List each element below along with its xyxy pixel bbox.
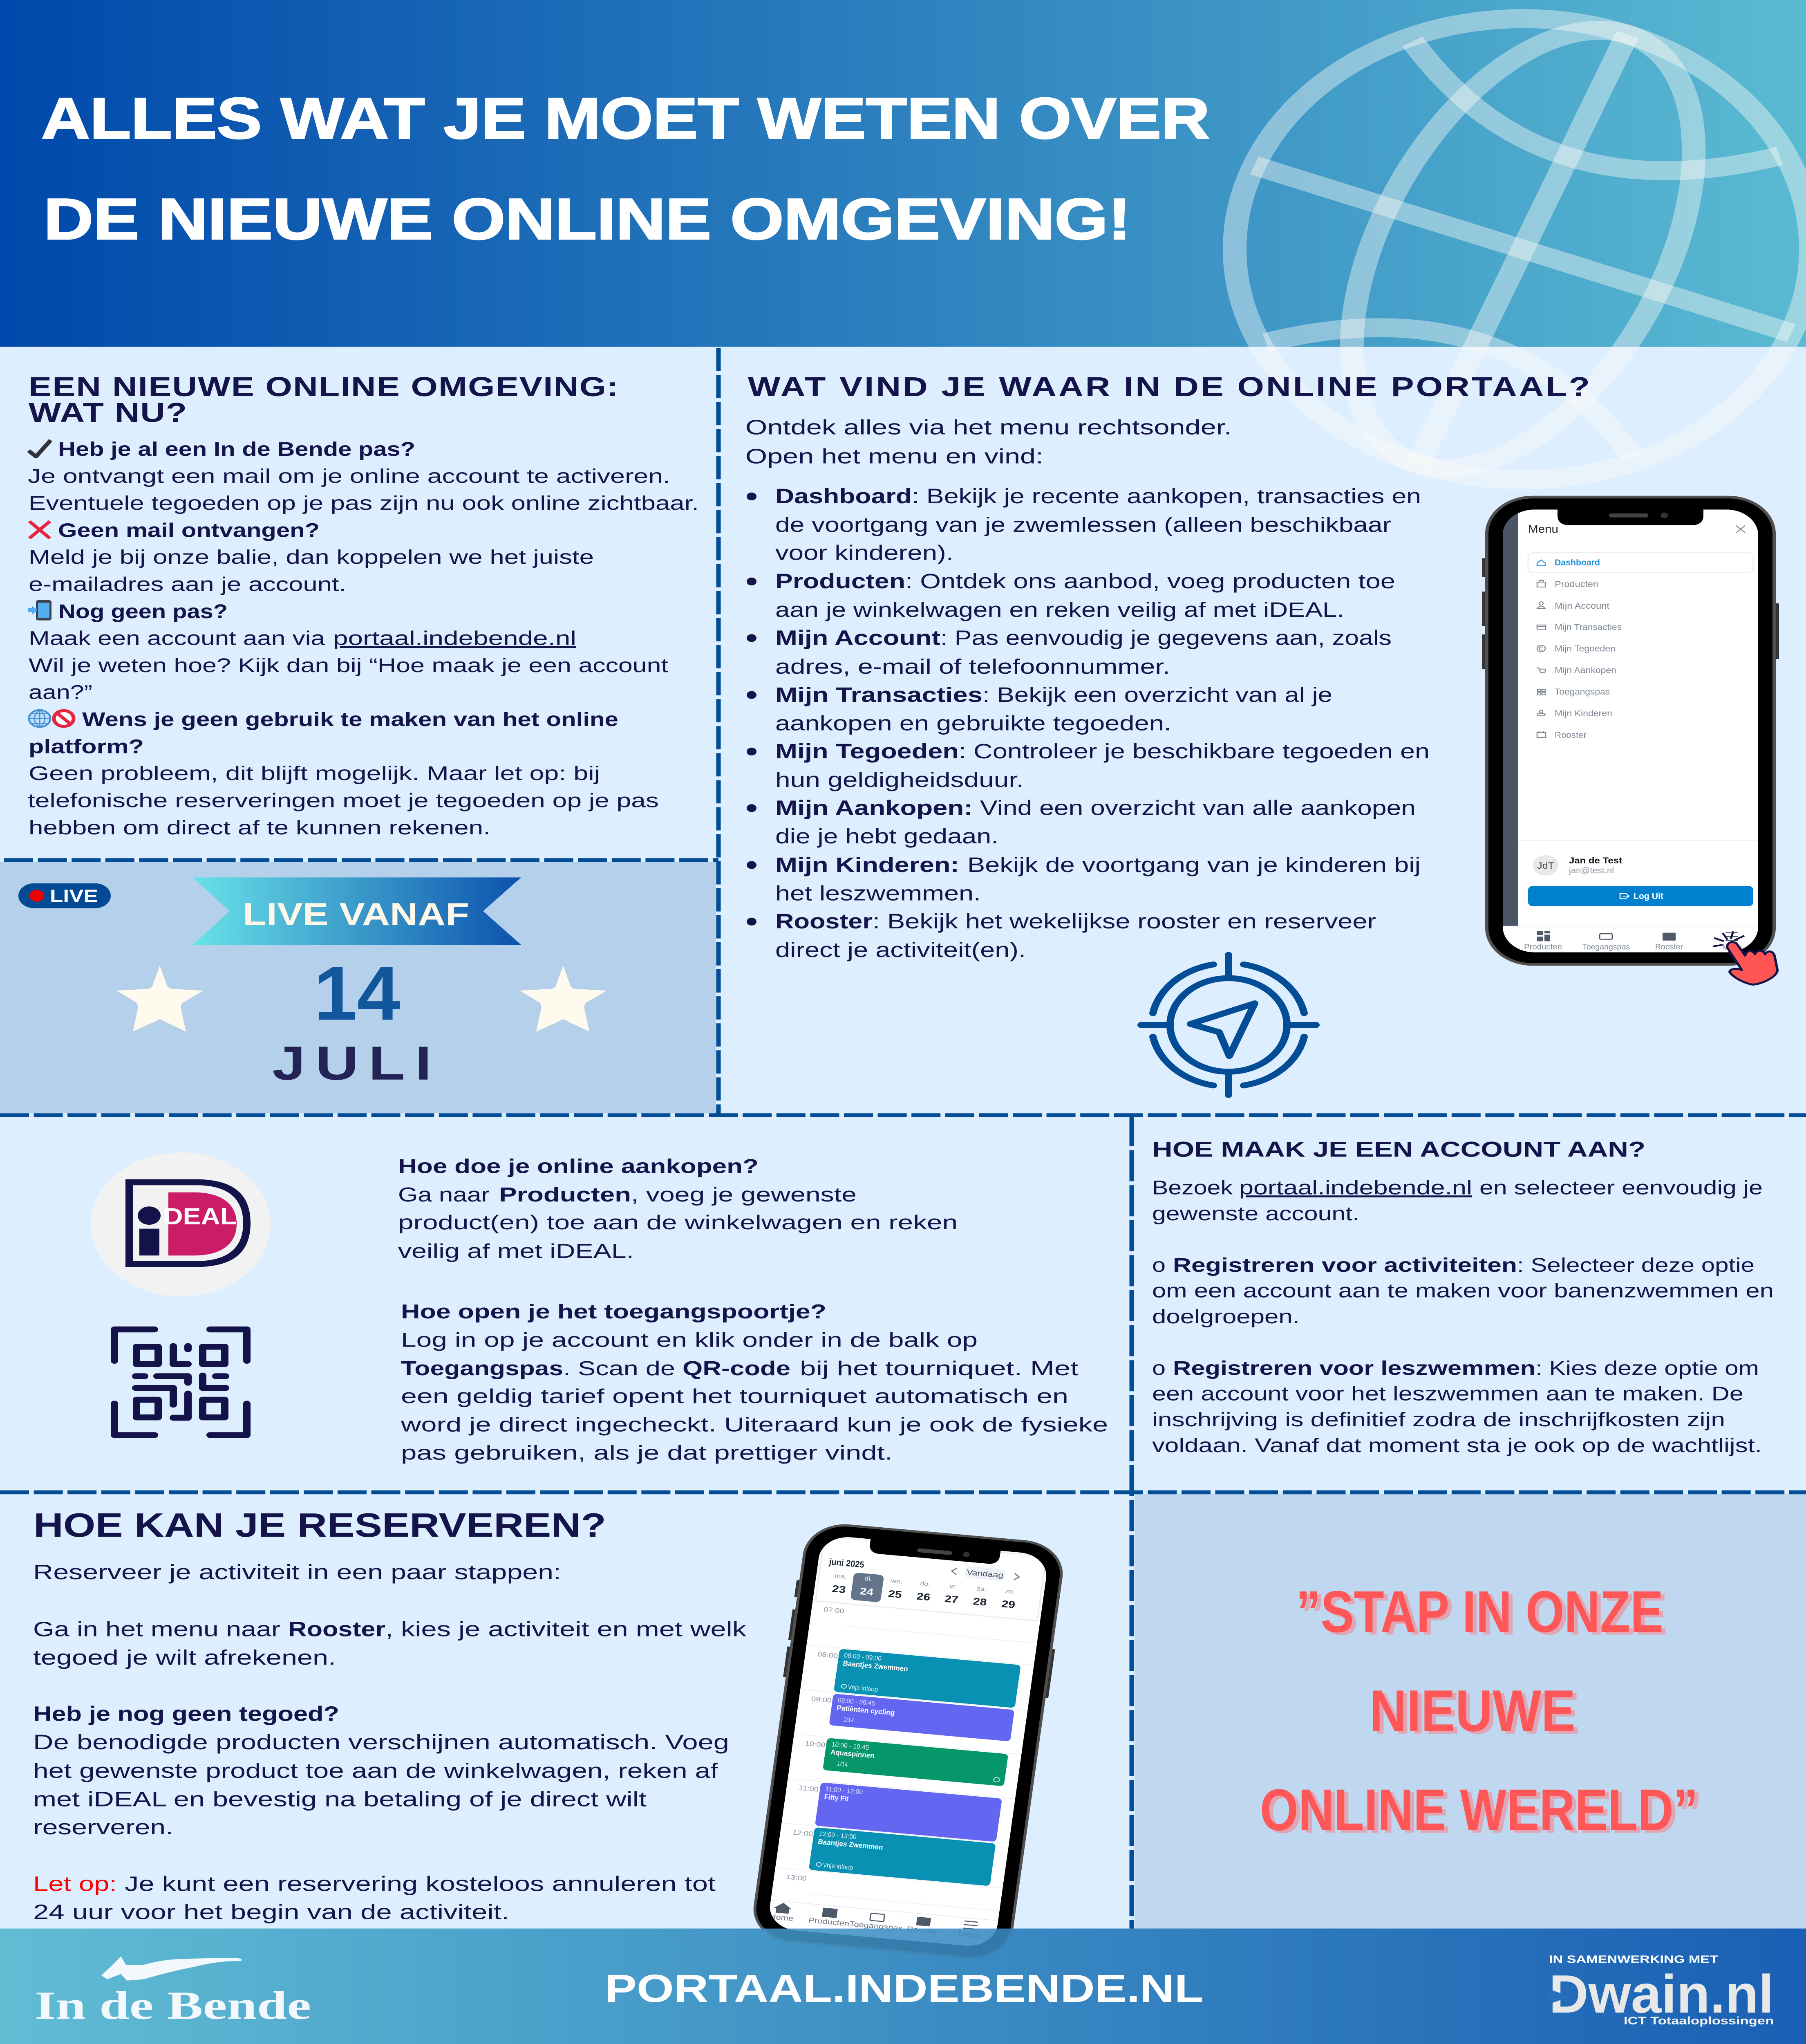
text: bezoek portaal: portaal.indebende.nl (1239, 1177, 1472, 1199)
event: baantjes zwemmen (834, 1649, 1021, 1708)
bullet list: direct je activiteit(en). (775, 939, 1026, 961)
bullet list: : Ontdek ons aanbod, voeg producten toe (905, 570, 1395, 593)
text block: toegangspoortje: Hoe open je het toegangspoortje? (401, 1300, 826, 1322)
text: nog geen pas: Wil je weten hoe? Kijk dan bij “Hoe maak je een account (29, 654, 668, 677)
text: let op: Let op: (33, 1873, 117, 1896)
icon: iDEAL logo (91, 1152, 271, 1296)
text: registreren activiteiten: doelgroepen. (1152, 1306, 1300, 1327)
menu item icons (1537, 560, 1546, 737)
text: heb je al een pas: Eventuele tegoeden op je pas zijn nu ook online zichtbaar. (29, 492, 699, 514)
text: nog geen pas: portaal.indebende.nl (333, 627, 576, 649)
logo: in de bende: In de Bende (35, 1983, 311, 2028)
text: stappen: , kies je activiteit en met welk (385, 1618, 747, 1641)
text block: toegangspoortje: Toegangspas (401, 1357, 563, 1380)
text block: toegangspoortje: QR-code (683, 1357, 790, 1380)
date header card: Vandaag (966, 1568, 1004, 1580)
bottom navigation: Producten (1524, 942, 1562, 951)
bullet list: Mijn Account (775, 627, 940, 650)
menu items: Toegangspas (1555, 687, 1610, 697)
date header card: 24 (859, 1585, 874, 1598)
menu items: Rooster (1555, 730, 1587, 740)
icon: phone with arrow (28, 600, 51, 621)
text: registreren leszwemmen: : Kies deze optie om (1535, 1357, 1759, 1379)
text block: toegangspoortje: bij het tourniquet. Met (800, 1357, 1079, 1380)
bullet list: Mijn Transacties (775, 684, 982, 706)
text: registreren activiteiten (1152, 1254, 1774, 1327)
bullet list: het leszwemmen. (775, 882, 981, 905)
panel: live vanaf 14 juli (18, 877, 606, 1090)
date header card: 29 (1001, 1598, 1016, 1610)
text: geen mail ontvangen: Meld je bij onze balie, dan koppelen we het juiste (29, 546, 594, 568)
text: let op: 24 uur voor het begin van de activiteit. (33, 1901, 509, 1924)
intro text: Ontdek alles via het menu rechtsonder. (745, 416, 1232, 439)
bullet list: die je hebt gedaan. (775, 825, 998, 848)
divider and user block: Jan de Test (1569, 856, 1622, 865)
text: nog geen pas: aan?” (29, 681, 92, 703)
heading: wat vind je waar: WAT VIND JE WAAR IN DE ONLINE PORTAAL? (748, 372, 1590, 402)
text: nog geen tegoed: De benodigde producten verschijnen automatisch. Voeg (33, 1731, 729, 1754)
phone: rooster screenshot (747, 1522, 1070, 1961)
text block: online aankopen: veilig af met iDEAL. (398, 1239, 634, 1262)
text: geen gebruik online platform: hebben om direct af te kunnen rekenen. (29, 817, 490, 838)
heading: een nieuwe online omgeving: WAT NU? (29, 397, 187, 428)
date header card: 27 (944, 1593, 959, 1605)
text: registreren activiteiten: : Selecteer deze optie (1517, 1254, 1755, 1276)
text block: online aankopen: Hoe doe je online aankopen? (398, 1155, 759, 1177)
time labels: 07:00 (824, 1606, 845, 1615)
time labels: 12:00 (792, 1829, 813, 1838)
phone notch (869, 1538, 1001, 1564)
time labels: 11:00 (798, 1784, 819, 1793)
bullet list: Bekijk de voortgang van je kinderen bij (967, 854, 1421, 876)
event: baantjes zwemmen: Baantjes Zwemmen (817, 1838, 884, 1851)
icon: QR code (114, 1329, 247, 1435)
text: nog geen tegoed: het gewenste product toe aan de winkelwagen, reken af (33, 1759, 718, 1782)
date header card: vr. (949, 1583, 958, 1590)
bullet list: hun geldigheidsduur. (775, 769, 1024, 791)
footer url: PORTAAL.INDEBENDE.NL (605, 1967, 1204, 2010)
bullet list: : Pas eenvoudig je gegevens aan, zoals (940, 627, 1392, 650)
text: geen gebruik online platform: Wens je geen gebruik te maken van het online (82, 708, 618, 731)
phone: menu screenshot (1482, 497, 1779, 964)
bullet list: de voortgang van je zwemlessen (alleen beschikbaar (775, 513, 1391, 536)
event: aquaspinnen (823, 1738, 1008, 1786)
divider and user block: JdT (1537, 861, 1554, 871)
text: stappen: Ga in het menu naar (33, 1618, 280, 1641)
text: stappen: Rooster (288, 1618, 385, 1641)
heading: een nieuwe online omgeving (29, 372, 618, 428)
text: registreren activiteiten: o (1152, 1254, 1166, 1276)
date header card: 23 (831, 1583, 846, 1595)
phone screen (1503, 509, 1758, 953)
divider and user block (1518, 840, 1758, 876)
date header card: 25 (888, 1588, 903, 1600)
bottom navigation: Rooster (906, 1925, 939, 1936)
event: aquaspinnen: Aquaspinnen (830, 1748, 875, 1760)
text: geen mail ontvangen: e-mailadres aan je account. (29, 573, 346, 595)
footer base (0, 1929, 1806, 2044)
text: nog geen tegoed: met iDEAL en bevestig na betaling of je direct wilt (33, 1788, 647, 1811)
text: registreren leszwemmen: voldaan. Vanaf dat moment sta je ook op de wachtlijst. (1152, 1434, 1762, 1457)
panel: een nieuwe online omgeving (28, 372, 699, 838)
title: DE NIEUWE ONLINE OMGEVING! (44, 187, 1131, 252)
text: heb je al een pas (28, 438, 699, 514)
text: nog geen tegoed (33, 1703, 729, 1839)
text: registreren activiteiten: om een account aan te maken voor banenzwemmen en (1152, 1280, 1774, 1302)
dashed dividers (0, 348, 1806, 1929)
text: registreren leszwemmen: o (1152, 1357, 1166, 1379)
menu items: Dashboard (1555, 558, 1600, 567)
bullet list: Vind een overzicht van alle aankopen (980, 797, 1416, 820)
time labels: 08:00 (817, 1651, 838, 1660)
menu items (1555, 558, 1622, 740)
logo: dwain: ICT Totaaloplossingen (1624, 2014, 1774, 2027)
bullet list: Dashboard (775, 485, 912, 508)
panel: slogan background (1135, 1494, 1806, 1929)
text: let op (33, 1873, 716, 1924)
event: fifty fit (815, 1782, 1002, 1842)
text: geen gebruik online platform: Geen probleem, dit blijft mogelijk. Maar let op: bij (29, 762, 600, 784)
event: aquaspinnen: 10:00 - 10:45 (831, 1741, 870, 1751)
panel: live date background (0, 862, 716, 1113)
bullet list: voor kinderen). (775, 542, 953, 565)
event: fifty fit: Fifty Fit (824, 1793, 849, 1803)
event: baantjes zwemmen (809, 1827, 996, 1886)
bullet list: : Bekijk het wekelijkse rooster en reserveer (873, 910, 1376, 933)
divider and user block: jan@test.nl (1569, 866, 1614, 875)
phone notch (1558, 509, 1703, 525)
text block: toegangspoortje: een geldig tarief opent het tourniquet automatisch en (401, 1385, 1068, 1407)
text block: online aankopen (398, 1155, 958, 1262)
bullet list: Rooster (775, 910, 873, 933)
text: registreren leszwemmen: Registreren voor leszwemmen (1173, 1357, 1535, 1379)
bottom navigation: Menu (958, 1930, 981, 1940)
ribbon: live vanaf (192, 877, 521, 945)
date number: 14 (314, 950, 400, 1036)
panel: account aanmaken (1152, 1137, 1774, 1457)
text block: toegangspoortje (401, 1300, 1108, 1464)
text: registreren leszwemmen (1152, 1357, 1762, 1457)
date header card: za. (976, 1585, 987, 1593)
phone body (1487, 497, 1774, 964)
bottom navigation: Toegangspas (1582, 942, 1630, 951)
event: baantjes zwemmen: Vrije inloop (847, 1683, 878, 1693)
bottom navigation: Toegangspas (849, 1920, 903, 1933)
event: patiënten cycling: Patiënten cycling (836, 1704, 895, 1717)
bullet list: Mijn Aankopen: (775, 797, 973, 820)
live badge: LIVE (50, 886, 98, 906)
icon: compass navigation (1141, 955, 1316, 1095)
event: baantjes zwemmen: 08:00 - 09:00 (844, 1652, 882, 1662)
event: baantjes zwemmen: Baantjes Zwemmen (842, 1659, 909, 1673)
footer band (0, 1929, 1806, 2044)
text: nog geen tegoed: reserveren. (33, 1816, 173, 1839)
phone screen (765, 1535, 1052, 1948)
date header card: juni 2025 (828, 1557, 865, 1570)
date month: JULI (272, 1037, 432, 1090)
phone side buttons (783, 1580, 1061, 1701)
date header card: 28 (972, 1596, 987, 1608)
icon: pointing hand (1713, 931, 1777, 984)
text block: online aankopen: , voeg je gewenste (631, 1183, 857, 1206)
title (41, 86, 1210, 252)
text: heb je al een pas: Heb je al een In de Bende pas? (58, 438, 415, 460)
event: fifty fit: 11:00 - 12:00 (825, 1785, 863, 1796)
text: stappen: tegoed je wilt afrekenen. (33, 1646, 336, 1669)
time labels: 09:00 (811, 1695, 832, 1704)
bullet list: Mijn Tegoeden (775, 740, 959, 763)
live badge (18, 883, 111, 908)
date header card: ma. (834, 1573, 847, 1580)
close icon (1736, 526, 1745, 533)
icon: red cross (29, 521, 50, 538)
intro text: Open het menu en vind: (745, 445, 1043, 468)
menu title: Menu (1528, 523, 1558, 535)
header band (0, 0, 1806, 347)
text: heb je al een pas: Je ontvangt een mail om je online account te activeren. (28, 465, 670, 487)
event: patiënten cycling: 09:00 - 09:45 (837, 1697, 876, 1707)
text: registreren activiteiten: Registreren voor activiteiten (1173, 1254, 1517, 1276)
event: patiënten cycling (829, 1694, 1014, 1741)
icon: right star (520, 966, 606, 1031)
text: stappen (33, 1561, 747, 1669)
date header card: wo. (890, 1578, 903, 1585)
text: nog geen pas: Nog geen pas? (58, 601, 228, 623)
text: geen gebruik online platform (28, 708, 659, 838)
menu items: Mijn Kinderen (1555, 708, 1612, 718)
ribbon: live vanaf: LIVE VANAF (243, 896, 469, 932)
bottom navigation (766, 1900, 1000, 1941)
text block: toegangspoortje: . Scan de (563, 1357, 675, 1380)
panel: hoe kan je reserveren (33, 1506, 747, 1924)
phone body (751, 1522, 1065, 1961)
bullet list: : Bekijk een overzicht van al je (982, 684, 1332, 706)
panel: wat vind je waar (745, 372, 1590, 961)
bullet list: Mijn Kinderen: (775, 854, 959, 876)
bullet list: aan je winkelwagen en reken veilig af met iDEAL. (775, 598, 1344, 621)
grid lines (772, 1623, 1037, 1911)
text: bezoek portaal: en selecteer eenvoudig je (1479, 1177, 1763, 1199)
text block: online aankopen: product(en) toe aan de winkelwagen en reken (398, 1211, 958, 1234)
text: bezoek portaal (1152, 1177, 1763, 1224)
bullet list (747, 485, 1430, 961)
time labels: 10:00 (805, 1739, 826, 1748)
text block: online aankopen: Ga naar (398, 1183, 490, 1206)
text: registreren leszwemmen: een account voor het leszwemmen aan te maken. De (1152, 1383, 1743, 1405)
text block: toegangspoortje: Log in op je account en klik onder in de balk op (401, 1328, 978, 1351)
event: baantjes zwemmen: Vrije inloop (822, 1861, 853, 1871)
icon: left star (116, 966, 203, 1031)
text: bezoek portaal: Bezoek (1152, 1177, 1233, 1199)
text: let op: Je kunt een reservering kosteloos annuleren tot (125, 1873, 716, 1896)
bottom navigation: Home (769, 1913, 794, 1923)
date header card: zo. (1005, 1588, 1016, 1595)
text: nog geen tegoed: Heb je nog geen tegoed? (33, 1703, 339, 1726)
bullet list: adres, e-mail of telefoonnummer. (775, 655, 1170, 678)
logo: dwain: IN SAMENWERKING MET (1549, 1954, 1718, 1966)
text block: toegangspoortje: word je direct ingecheckt. Uiteraard kun je ook de fysieke (401, 1413, 1108, 1436)
time labels (786, 1606, 845, 1882)
bottom navigation: Menu (1722, 942, 1742, 951)
date header card: di. (864, 1575, 873, 1582)
log out button (1528, 886, 1753, 906)
date header card (816, 1537, 1046, 1621)
slogan: NIEUWE (1370, 1678, 1575, 1744)
bottom navigation: Rooster (1655, 942, 1683, 951)
bullet list: : Controleer je beschikbare tegoeden en (959, 740, 1430, 763)
bullet list: aankopen en gebruikte tegoeden. (775, 712, 1171, 735)
menu items: Mijn Account (1555, 601, 1609, 610)
heading: reserveren: HOE KAN JE RESERVEREN? (34, 1506, 606, 1544)
text: nog geen pas (29, 601, 668, 703)
event: aquaspinnen: 1/14 (837, 1760, 848, 1768)
text: nog geen pas: Maak een account aan via (29, 627, 325, 649)
icon: iDEAL logo: DEAL (163, 1203, 237, 1230)
text: stappen: Reserveer je activiteit in een paar stappen: (33, 1561, 561, 1584)
slogan (1260, 1578, 1698, 1843)
text: geen gebruik online platform: platform? (29, 735, 144, 758)
text block: online aankopen: Producten (499, 1183, 631, 1206)
icon: globe and prohibited sign (29, 710, 74, 727)
icon: check mark (29, 440, 51, 457)
menu items: Producten (1555, 579, 1598, 589)
heading: account aanmaken: HOE MAAK JE EEN ACCOUNT AAN? (1152, 1137, 1645, 1161)
phone side buttons (1482, 558, 1779, 669)
text: registreren leszwemmen: inschrijving is definitief zodra de inschrijfkosten zijn (1152, 1409, 1725, 1430)
menu items: Mijn Transacties (1555, 622, 1622, 632)
menu items: Mijn Aankopen (1555, 666, 1616, 675)
bullet list: Producten (775, 570, 905, 593)
event: patiënten cycling: 1/14 (843, 1716, 855, 1724)
text block: toegangspoortje: pas gebruiken, als je dat prettiger vindt. (401, 1441, 893, 1464)
time labels: 13:00 (786, 1873, 807, 1882)
bottom navigation (1503, 926, 1758, 951)
text: geen mail ontvangen (29, 519, 594, 595)
date header card: do. (920, 1580, 931, 1588)
bottom navigation: Producten (808, 1916, 850, 1928)
intro text (745, 416, 1232, 468)
logo: in de bende (35, 1957, 311, 2028)
icon: globe watermark (1223, 9, 1806, 489)
menu items: Mijn Tegoeden (1555, 644, 1616, 653)
log out button: Log Uit (1634, 892, 1663, 901)
text: bezoek portaal: gewenste account. (1152, 1203, 1359, 1224)
heading: een nieuwe online omgeving: EEN NIEUWE ONLINE OMGEVING: (29, 372, 618, 402)
date header card: 26 (916, 1590, 931, 1603)
bullet list: : Bekijk je recente aankopen, transacties en (912, 485, 1421, 508)
text: geen mail ontvangen: Geen mail ontvangen? (58, 519, 320, 541)
event: baantjes zwemmen: 12:00 - 13:00 (819, 1830, 857, 1840)
text: geen gebruik online platform: telefonische reserveringen moet je tegoeden op je pas (28, 789, 659, 811)
title: ALLES WAT JE MOET WETEN OVER (41, 86, 1210, 151)
